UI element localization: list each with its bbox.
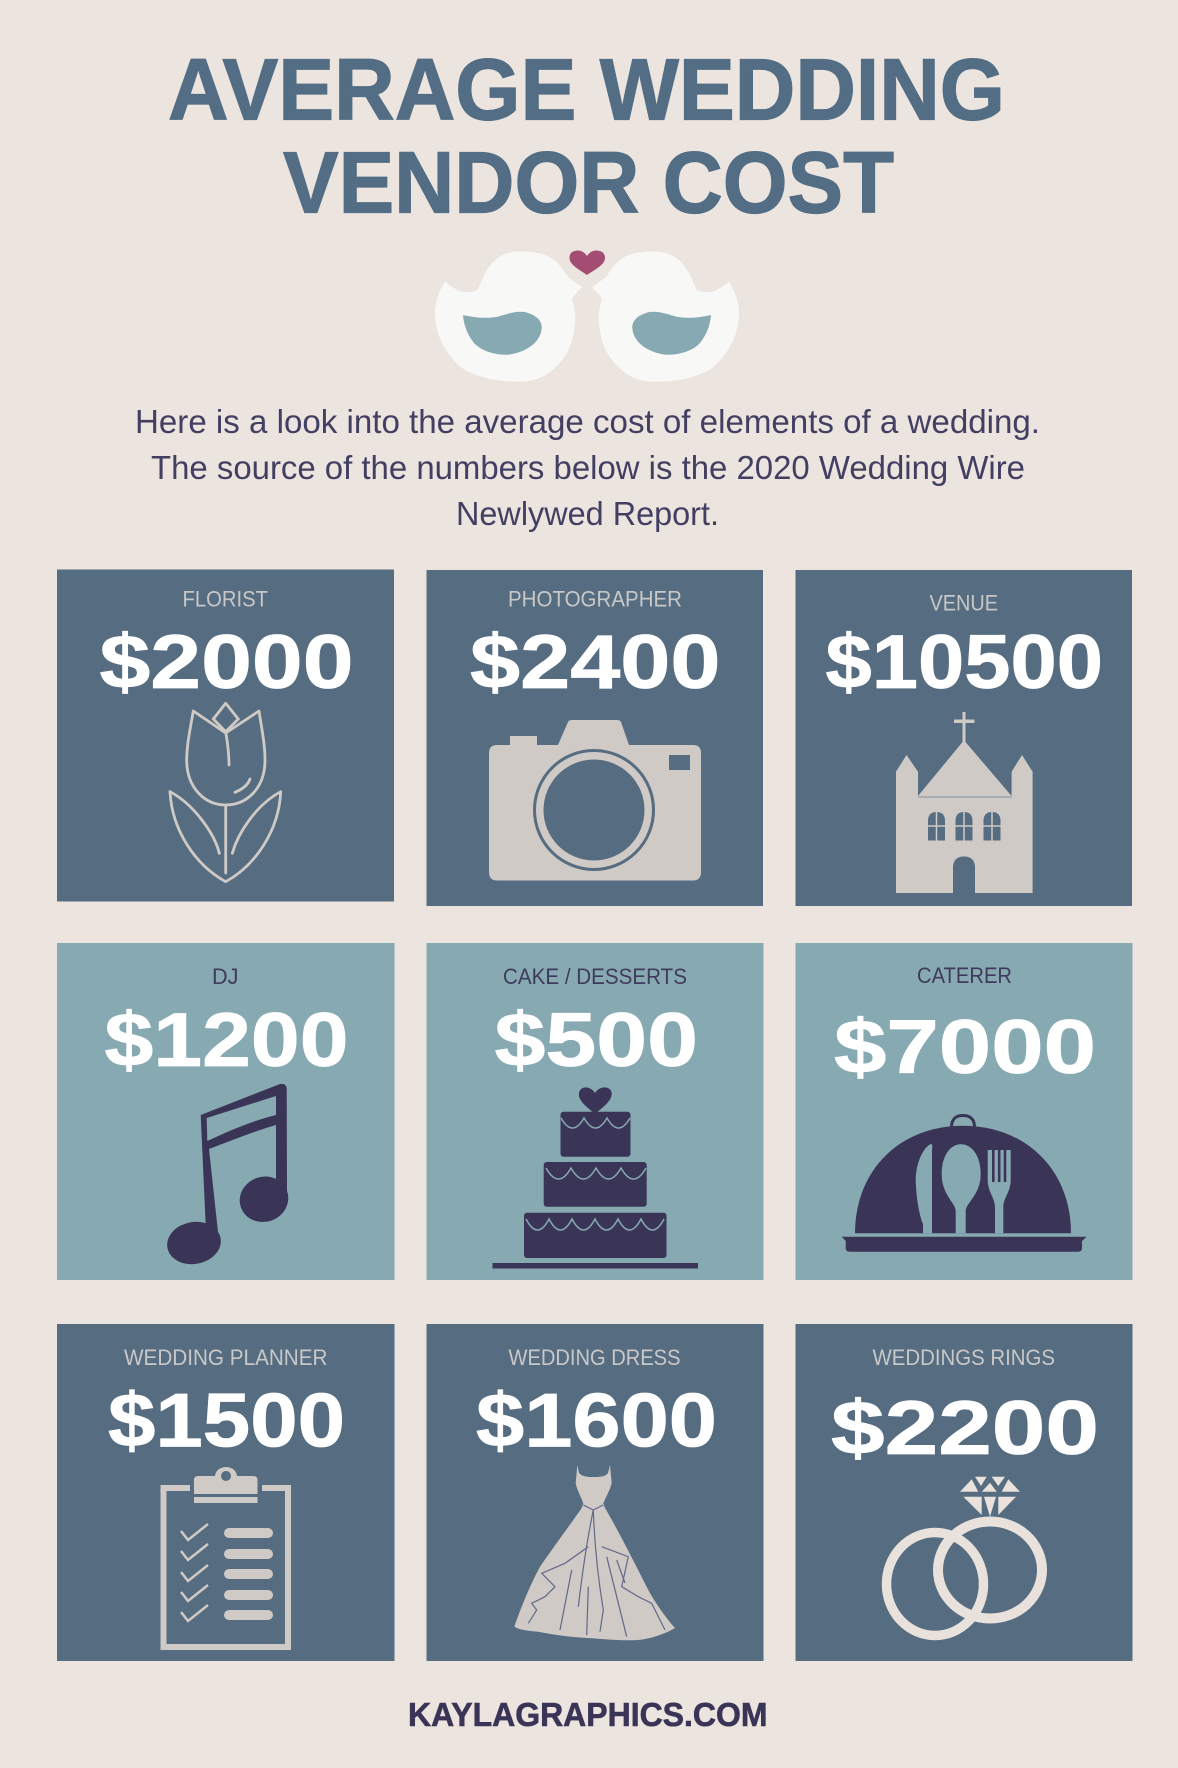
panel: dj (57, 943, 394, 1280)
panel: dj: $1200 (104, 998, 348, 1083)
icon: camera (489, 720, 701, 880)
panel: cake / desserts: CAKE / DESSERTS (503, 964, 687, 989)
footer website: KAYLAGRAPHICS.COM (408, 1696, 768, 1733)
panel: wedding rings (796, 1324, 1132, 1661)
icon: church (896, 712, 1033, 893)
icon: wedding rings (886, 1477, 1042, 1636)
icon: tulip (170, 703, 281, 882)
panel: venue (796, 570, 1132, 906)
panel: cake / desserts: $500 (494, 998, 698, 1083)
panel: wedding rings: $2200 (831, 1386, 1099, 1471)
panel: caterer (796, 943, 1132, 1280)
panel: photographer: $2400 (470, 620, 720, 705)
panel: florist (57, 570, 394, 902)
panel: florist: FLORIST (182, 586, 268, 612)
panel: caterer: CATERER (917, 963, 1012, 988)
title (168, 42, 1005, 232)
panel: dj: DJ (212, 964, 238, 989)
icon: clipboard checklist (164, 1467, 288, 1647)
panel: wedding dress: $1600 (476, 1378, 717, 1464)
panel: wedding planner: WEDDING PLANNER (124, 1345, 328, 1370)
icon: love birds (435, 250, 739, 382)
panel: florist: $2000 (100, 620, 354, 705)
panel: caterer: $7000 (834, 1005, 1096, 1090)
intro text: The source of the numbers below is the 2020 Wedding Wire (151, 449, 1025, 486)
panel: cake / desserts (426, 943, 764, 1280)
panel: wedding dress (426, 1324, 764, 1661)
icon: tiered cake (492, 1087, 698, 1268)
title: VENDOR COST (283, 134, 894, 232)
panel: wedding planner (57, 1324, 394, 1661)
panel: photographer (426, 570, 763, 906)
panel: venue: VENUE (930, 590, 998, 616)
panel: wedding rings: WEDDINGS RINGS (872, 1345, 1055, 1370)
panel: venue: $10500 (826, 620, 1103, 705)
panel: photographer: PHOTOGRAPHER (508, 586, 682, 612)
intro text: Newlywed Report. (456, 495, 719, 532)
title: AVERAGE WEDDING (168, 42, 1005, 138)
icon: wedding dress (514, 1465, 675, 1640)
icon: music notes (164, 1084, 295, 1268)
panel: wedding dress: WEDDING DRESS (508, 1345, 680, 1370)
intro text (135, 403, 1040, 532)
intro text: Here is a look into the average cost of elements of a wedding. (135, 403, 1040, 440)
icon: food cloche (842, 1116, 1087, 1252)
panel: wedding planner: $1500 (108, 1378, 345, 1464)
